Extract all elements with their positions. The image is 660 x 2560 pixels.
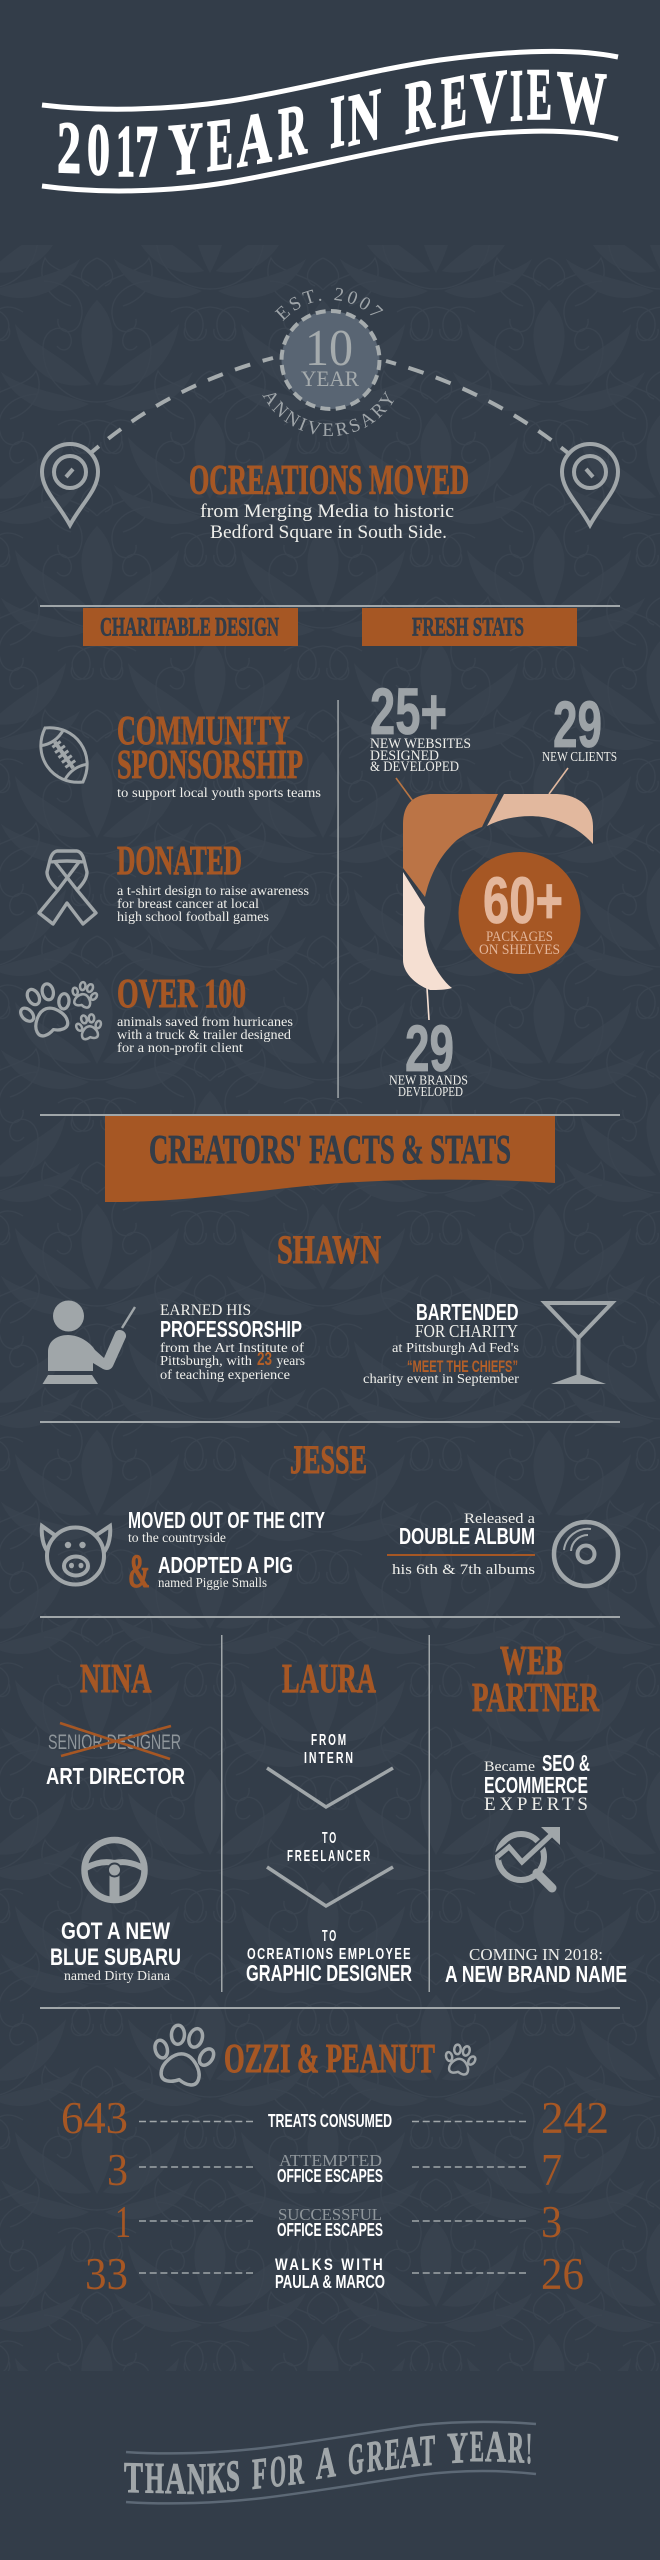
stat: 25+ new websites: & DEVELOPED bbox=[370, 759, 459, 775]
stat row: walks: PAULA & MARCO bbox=[275, 2272, 385, 2292]
title banner: 2017 Year in Review: V bbox=[470, 54, 507, 141]
To freelancer: TO bbox=[322, 1830, 338, 1847]
closing banner: Thanks for a great year: K bbox=[207, 2453, 226, 2503]
Got a new Blue Subaru: BLUE SUBARU bbox=[50, 1944, 181, 1971]
professorship text bbox=[160, 1302, 305, 1383]
title banner: 2017 Year in Review: I bbox=[510, 55, 523, 137]
chart: ring segments bbox=[396, 768, 593, 1020]
moved text: MOVED OUT OF THE CITY bbox=[128, 1507, 325, 1533]
bartended text: BARTENDED bbox=[416, 1299, 518, 1325]
stat: 29 new brands: NEW BRANDS bbox=[389, 1074, 468, 1088]
bartended text: charity event in September bbox=[363, 1372, 519, 1387]
move description: from Merging Media to historic bbox=[200, 501, 454, 522]
stat row: treats consumed bbox=[61, 2093, 609, 2143]
adopted text: named Piggie Smalls bbox=[158, 1575, 267, 1590]
stat: 25+ new websites: 25+ bbox=[370, 674, 447, 748]
panel: Shawn bbox=[42, 1227, 612, 1387]
heading: Nina: NINA bbox=[80, 1655, 152, 1701]
closing banner: Thanks for a great year: R bbox=[508, 2423, 525, 2472]
stat row: treats consumed: 242 bbox=[541, 2093, 609, 2143]
closing banner: Thanks for a great year: N bbox=[187, 2454, 206, 2504]
panel: Web Partner bbox=[445, 1637, 627, 1987]
stat: 29 new brands: DEVELOPED bbox=[398, 1085, 463, 1100]
icon: analytics magnifier bbox=[497, 1827, 560, 1888]
Got a new Blue Subaru bbox=[50, 1918, 181, 1983]
closing banner: Thanks for a great year: A bbox=[400, 2427, 420, 2478]
title banner: 2017 Year in Review: A bbox=[237, 96, 272, 184]
SEO and ecommerce text: Became bbox=[484, 1759, 535, 1775]
From intern bbox=[304, 1732, 355, 1767]
album text: Released a bbox=[464, 1511, 536, 1527]
chevron arrow bbox=[267, 1768, 393, 1807]
title banner: 2017 Year in Review: E bbox=[527, 54, 552, 136]
closing banner: Thanks for a great year: T bbox=[420, 2426, 435, 2476]
heading: Community Sponsorship bbox=[117, 707, 303, 787]
title banner: 2017 Year in Review: 7 bbox=[135, 111, 158, 193]
title banner: 2017 Year in Review: 2 bbox=[57, 107, 81, 190]
icon: left map pin bbox=[42, 444, 98, 525]
closing banner: Thanks for a great year: R bbox=[367, 2429, 383, 2482]
To Ocreations employee graphic designer: OCREATIONS EMPLOYEE bbox=[247, 1946, 412, 1963]
adopted text: ADOPTED A PIG bbox=[158, 1552, 293, 1578]
stat: 60+ packages bbox=[458, 852, 580, 974]
album text: his 6th & 7th albums bbox=[392, 1562, 535, 1578]
anniversary badge: ANNIVERSARY bbox=[262, 391, 394, 436]
title banner: 2017 Year in Review: 0 bbox=[87, 109, 110, 192]
title banner: 2017 Year in Review: R bbox=[405, 61, 435, 151]
tab: Fresh Stats: FRESH STATS bbox=[412, 612, 524, 642]
crossed out title bbox=[48, 1723, 181, 1759]
title banner: 2017 Year in Review: Y bbox=[168, 107, 203, 192]
heading: Shawn: SHAWN bbox=[277, 1227, 381, 1272]
donated text: high school football games bbox=[117, 909, 269, 924]
heading: Web Partner bbox=[472, 1637, 599, 1720]
closing banner: Thanks for a great year: S bbox=[226, 2451, 240, 2501]
Got a new Blue Subaru: named Dirty Diana bbox=[64, 1968, 170, 1983]
panel: Nina bbox=[46, 1655, 185, 1983]
icon: right map pin bbox=[562, 444, 618, 525]
icon: ribbon bbox=[39, 851, 96, 924]
professorship text: 23 bbox=[257, 1349, 272, 1369]
bartended text bbox=[363, 1299, 519, 1387]
title banner: 2017 Year in Review: N bbox=[348, 73, 381, 163]
To freelancer bbox=[287, 1830, 372, 1865]
move description: Bedford Square in South Side. bbox=[210, 522, 447, 543]
moved text: to the countryside bbox=[128, 1530, 226, 1545]
stat: 29 new clients: NEW CLIENTS bbox=[542, 750, 617, 765]
professorship text: from the Art Institute of bbox=[160, 1341, 304, 1356]
professorship text: PROFESSORSHIP bbox=[160, 1316, 302, 1342]
stat: 29 new clients: 29 bbox=[553, 687, 602, 761]
donated text: a t-shirt design to raise awareness bbox=[117, 883, 309, 898]
heading: Laura: LAURA bbox=[282, 1655, 376, 1701]
over 100 text: with a truck & trailer designed bbox=[117, 1027, 291, 1042]
SEO and ecommerce text: EXPERTS bbox=[484, 1794, 588, 1815]
From intern: FROM bbox=[311, 1732, 348, 1749]
donated text: for breast cancer at local bbox=[117, 896, 259, 911]
To freelancer: FREELANCER bbox=[287, 1848, 372, 1865]
icon: small paw bbox=[442, 2042, 479, 2076]
tab: Charitable Design: CHARITABLE DESIGN bbox=[100, 612, 279, 642]
closing banner: Thanks for a great year bbox=[124, 2422, 536, 2504]
tab: Charitable Design bbox=[83, 608, 298, 646]
bartended text: FOR CHARITY bbox=[415, 1321, 518, 1341]
title banner: 2017 Year in Review: 1 bbox=[116, 111, 135, 193]
stat row: treats consumed: 643 bbox=[61, 2093, 128, 2143]
stat row: walks bbox=[85, 2249, 584, 2299]
stat: 25+ new websites: NEW WEBSITES bbox=[370, 736, 471, 752]
stat: 25+ new websites bbox=[370, 674, 471, 775]
title banner: 2017 Year in Review: I bbox=[330, 79, 345, 165]
heading: Community Sponsorship: COMMUNITY bbox=[117, 707, 290, 753]
Coming in 2018 bbox=[445, 1945, 627, 1987]
heading: Web Partner: PARTNER bbox=[472, 1674, 599, 1720]
bartended text: “MEET THE CHIEFS” bbox=[407, 1357, 518, 1376]
icon: large paw bbox=[147, 2021, 220, 2088]
panel: Jesse bbox=[42, 1437, 618, 1598]
stat row: treats consumed: TREATS CONSUMED bbox=[268, 2111, 392, 2131]
stat row: walks: 33 bbox=[85, 2249, 128, 2299]
stat: 29 new brands bbox=[389, 1011, 468, 1100]
closing banner: Thanks for a great year: E bbox=[470, 2422, 484, 2471]
Coming in 2018: COMING IN 2018: bbox=[469, 1945, 603, 1964]
icon: martini glass bbox=[545, 1303, 612, 1384]
tab: Fresh Stats bbox=[362, 608, 577, 646]
title banner: 2017 Year in Review: R bbox=[278, 87, 307, 176]
closing banner: Thanks for a great year: R bbox=[288, 2444, 305, 2495]
donated text bbox=[117, 883, 309, 924]
SEO and ecommerce text bbox=[484, 1750, 590, 1815]
icon: football bbox=[28, 716, 100, 794]
panel: office move bbox=[40, 288, 620, 543]
From intern: INTERN bbox=[304, 1750, 355, 1767]
anniversary badge: 10 bbox=[305, 320, 353, 377]
stat row: walks: 26 bbox=[541, 2249, 584, 2299]
stat row: attempted office escapes: 7 bbox=[541, 2145, 562, 2195]
stat row: attempted office escapes: OFFICE ESCAPES bbox=[277, 2166, 383, 2186]
stat row: successful office escapes: OFFICE ESCAPES bbox=[277, 2220, 383, 2240]
over 100 text bbox=[117, 1014, 293, 1055]
closing banner: Thanks for a great year: A bbox=[485, 2422, 506, 2471]
closing banner: Thanks for a great year: E bbox=[385, 2429, 400, 2480]
heading: Web Partner: WEB bbox=[500, 1637, 563, 1683]
Art Director: ART DIRECTOR bbox=[46, 1763, 185, 1789]
icon: steering wheel bbox=[84, 1840, 144, 1900]
closing banner: Thanks for a great year: A bbox=[165, 2454, 186, 2503]
heading: Over 100: OVER 100 bbox=[117, 970, 246, 1016]
icon: paw prints bbox=[12, 977, 104, 1042]
To Ocreations employee graphic designer bbox=[246, 1928, 412, 1986]
adopted text bbox=[158, 1552, 293, 1590]
stat: 60+ packages: ON SHELVES bbox=[479, 942, 560, 958]
stat row: successful office escapes: 1 bbox=[115, 2197, 131, 2247]
closing banner: Thanks for a great year: F bbox=[252, 2448, 267, 2499]
professorship text: years bbox=[276, 1354, 305, 1369]
move description bbox=[200, 501, 454, 543]
over 100 text: for a non-profit client bbox=[117, 1040, 243, 1055]
album text: DOUBLE ALBUM bbox=[399, 1523, 535, 1549]
crossed out title: SENIOR DESIGNER bbox=[48, 1731, 181, 1754]
bartended text: at Pittsburgh Ad Fed's bbox=[392, 1341, 519, 1356]
anniversary badge: EST. 2007 bbox=[274, 288, 384, 321]
stat row: successful office escapes: 3 bbox=[541, 2197, 562, 2247]
closing banner: Thanks for a great year: Y bbox=[447, 2423, 468, 2473]
heading: Jesse: JESSE bbox=[290, 1437, 367, 1482]
closing banner: Thanks for a great year: G bbox=[348, 2432, 364, 2485]
closing banner: Thanks for a great year: ! bbox=[526, 2424, 532, 2473]
anniversary badge bbox=[262, 288, 394, 436]
panel: charitable design bbox=[12, 707, 321, 1055]
sponsorship text: to support local youth sports teams bbox=[117, 785, 321, 800]
To Ocreations employee graphic designer: TO bbox=[322, 1928, 338, 1945]
stat row: successful office escapes: SUCCESSFUL bbox=[278, 2205, 382, 2224]
panel: Laura bbox=[246, 1655, 412, 1986]
closing banner: Thanks for a great year: O bbox=[270, 2446, 286, 2497]
anniversary badge: YEAR bbox=[301, 366, 359, 391]
stat row: attempted office escapes: ATTEMPTED bbox=[279, 2151, 382, 2170]
SEO and ecommerce text: ECOMMERCE bbox=[484, 1772, 588, 1798]
stat row: attempted office escapes: 3 bbox=[107, 2145, 128, 2195]
stat: 29 new brands: 29 bbox=[405, 1011, 454, 1085]
over 100 text: animals saved from hurricanes bbox=[117, 1014, 293, 1029]
stat row: walks: WALKS WITH bbox=[275, 2255, 385, 2274]
professorship text: of teaching experience bbox=[160, 1368, 290, 1383]
heading: Community Sponsorship: SPONSORSHIP bbox=[117, 741, 303, 787]
closing banner: Thanks for a great year: A bbox=[316, 2437, 336, 2489]
SEO and ecommerce text: SEO & bbox=[542, 1750, 590, 1776]
Got a new Blue Subaru: GOT A NEW bbox=[61, 1918, 171, 1945]
stat row: attempted office escapes bbox=[107, 2145, 562, 2195]
panel: fresh stats bbox=[370, 674, 617, 1100]
title banner: 2017 Year in Review bbox=[42, 51, 618, 193]
heading: Ocreations Moved: OCREATIONS MOVED bbox=[189, 458, 469, 504]
closing banner: Thanks for a great year: T bbox=[124, 2453, 143, 2502]
banner: Creators' Facts & Stats bbox=[105, 1116, 555, 1202]
stat: 60+ packages: 60+ bbox=[483, 863, 563, 937]
professorship text: Pittsburgh, with bbox=[160, 1354, 252, 1369]
stat row: successful office escapes bbox=[115, 2197, 562, 2247]
title banner: 2017 Year in Review: E bbox=[207, 103, 233, 188]
album text bbox=[387, 1511, 536, 1578]
title banner: 2017 Year in Review: W bbox=[557, 56, 607, 140]
moved text bbox=[128, 1507, 325, 1545]
icon: vinyl disc bbox=[554, 1522, 618, 1586]
ampersand: & bbox=[128, 1545, 150, 1598]
chevron arrow bbox=[267, 1867, 393, 1906]
To Ocreations employee graphic designer: GRAPHIC DESIGNER bbox=[246, 1960, 412, 1986]
dashed route arcs bbox=[92, 358, 568, 453]
heading: Donated: DONATED bbox=[117, 837, 242, 883]
closing banner: Thanks for a great year: H bbox=[145, 2454, 164, 2503]
stat: 25+ new websites: DESIGNED bbox=[370, 748, 439, 764]
professorship text: EARNED HIS bbox=[160, 1302, 251, 1319]
icon: pig bbox=[42, 1526, 110, 1584]
heading: Ozzi & Peanut: OZZI & PEANUT bbox=[224, 2035, 435, 2081]
panel: Ozzi and Peanut bbox=[61, 2021, 609, 2299]
stat: 60+ packages: PACKAGES bbox=[486, 929, 553, 945]
title banner: 2017 Year in Review: E bbox=[441, 58, 467, 146]
icon: teacher bbox=[42, 1300, 135, 1384]
